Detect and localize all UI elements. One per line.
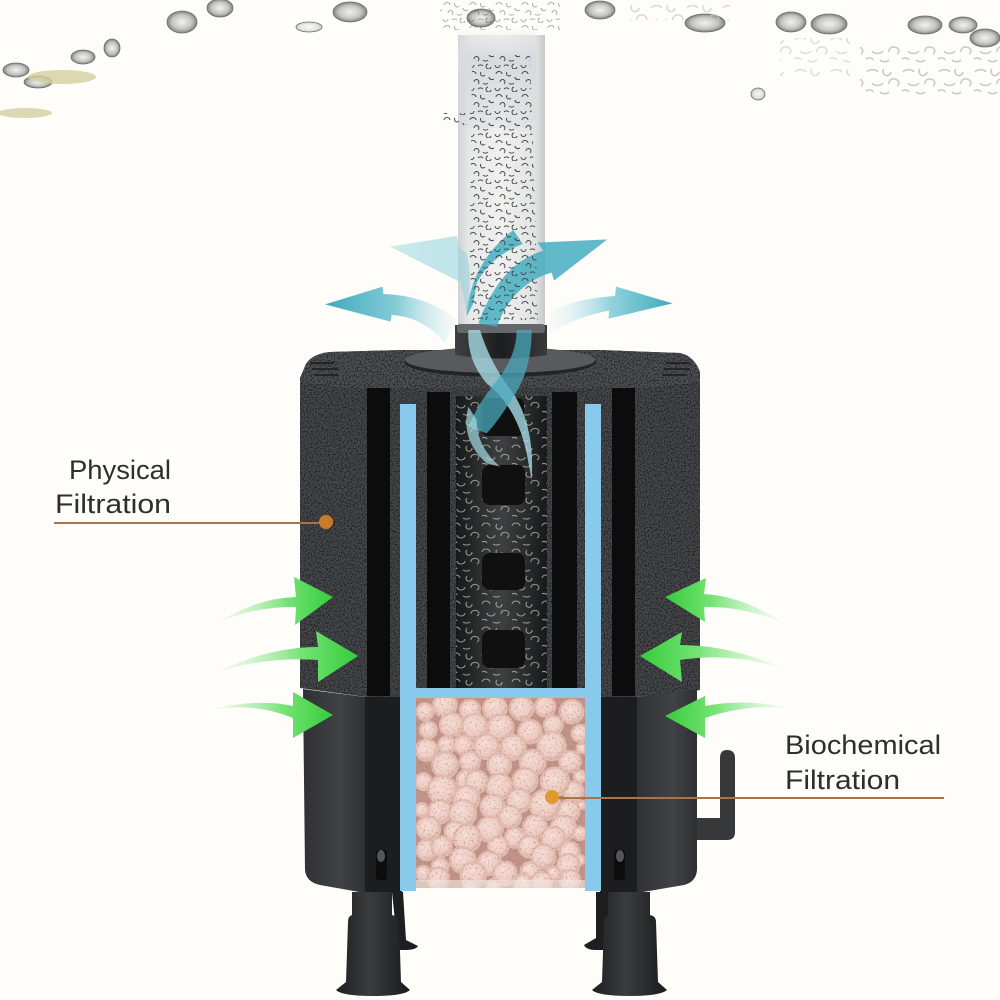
inflow arrow right 2 <box>640 632 782 682</box>
inflow arrow right 3 <box>665 696 788 738</box>
tube bubbles <box>440 55 538 320</box>
inflow arrow right 1 <box>665 578 782 622</box>
air tube <box>458 28 545 335</box>
arrow: upper left <box>390 236 470 317</box>
callout: physical filtration <box>54 455 333 529</box>
twisting water ribbon <box>468 330 532 480</box>
air nozzle <box>697 750 735 840</box>
inflow arrow left 2 <box>218 631 358 682</box>
blue container frame <box>400 404 601 891</box>
chamber bubbles <box>456 396 547 688</box>
centre chamber <box>456 396 547 688</box>
foam grooves <box>310 362 690 376</box>
callout: biochemical filtration: Biochemical <box>785 730 941 760</box>
bubble clusters upper right <box>440 0 1000 100</box>
callout: biochemical filtration: Filtration <box>785 765 900 795</box>
callout: physical filtration: Physical <box>69 455 171 485</box>
inflow arrow left 1 <box>218 577 333 625</box>
algae flecks <box>0 70 96 118</box>
media speckle <box>416 698 585 888</box>
callout: physical filtration: Filtration <box>55 489 171 519</box>
callout: biochemical filtration <box>545 730 944 804</box>
filter body foam <box>300 350 700 697</box>
arrow: upper right <box>478 239 607 327</box>
foam texture <box>300 350 700 697</box>
black slots <box>367 388 635 696</box>
outflow arrows <box>325 230 673 480</box>
biological media <box>415 693 588 894</box>
arrow: left <box>325 287 457 343</box>
base plate and outlet collar <box>404 324 596 377</box>
inflow arrow left 3 <box>210 692 333 738</box>
windows <box>482 398 525 668</box>
arrow: right <box>548 287 673 333</box>
lower housing <box>303 689 697 893</box>
legs <box>336 892 667 996</box>
surface bubbles <box>3 0 1000 100</box>
arrow: upper ribbon <box>467 230 523 317</box>
